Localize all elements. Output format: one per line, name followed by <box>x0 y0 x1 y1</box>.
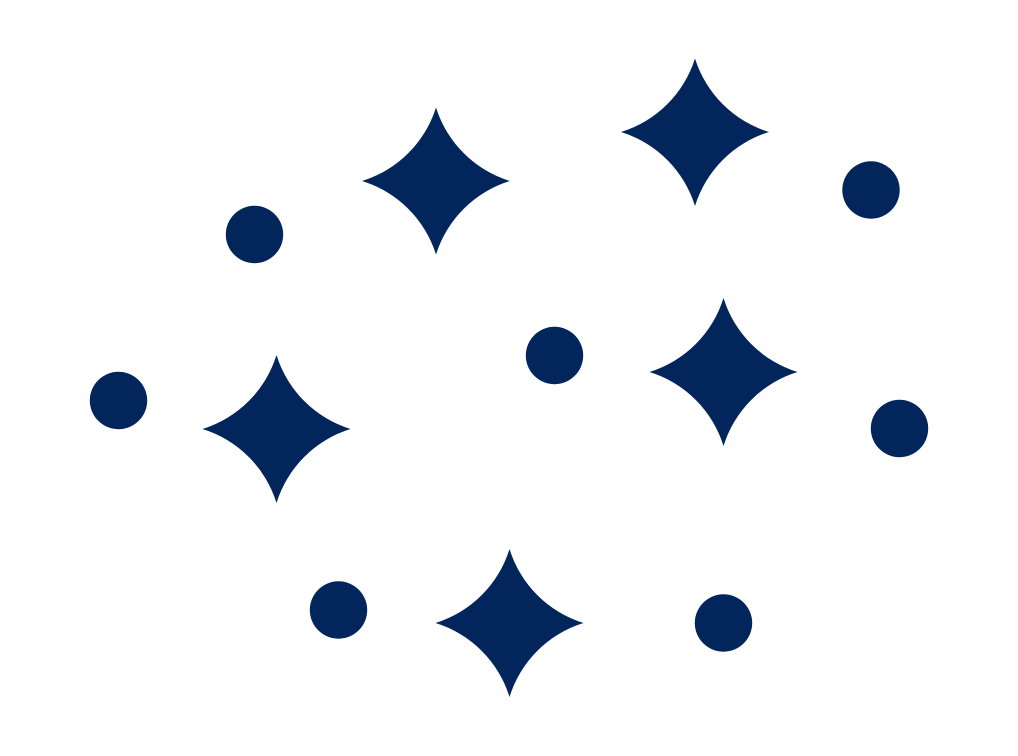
icon: dot far right <box>871 400 928 457</box>
icon: dot upper left <box>226 206 283 263</box>
icon: dot upper right <box>842 161 900 219</box>
icon: four-point star top right <box>621 58 769 206</box>
icon: dot bottom right <box>695 594 752 652</box>
icon: dot bottom left <box>310 581 367 639</box>
icon: dot far left <box>90 372 147 429</box>
icon: four-point star bottom centre <box>436 549 584 697</box>
icon: four-point star middle left <box>202 355 350 503</box>
icon: four-point star middle right <box>650 298 798 446</box>
icon: dot centre <box>526 327 583 384</box>
icon: four-point star top centre <box>362 108 510 254</box>
